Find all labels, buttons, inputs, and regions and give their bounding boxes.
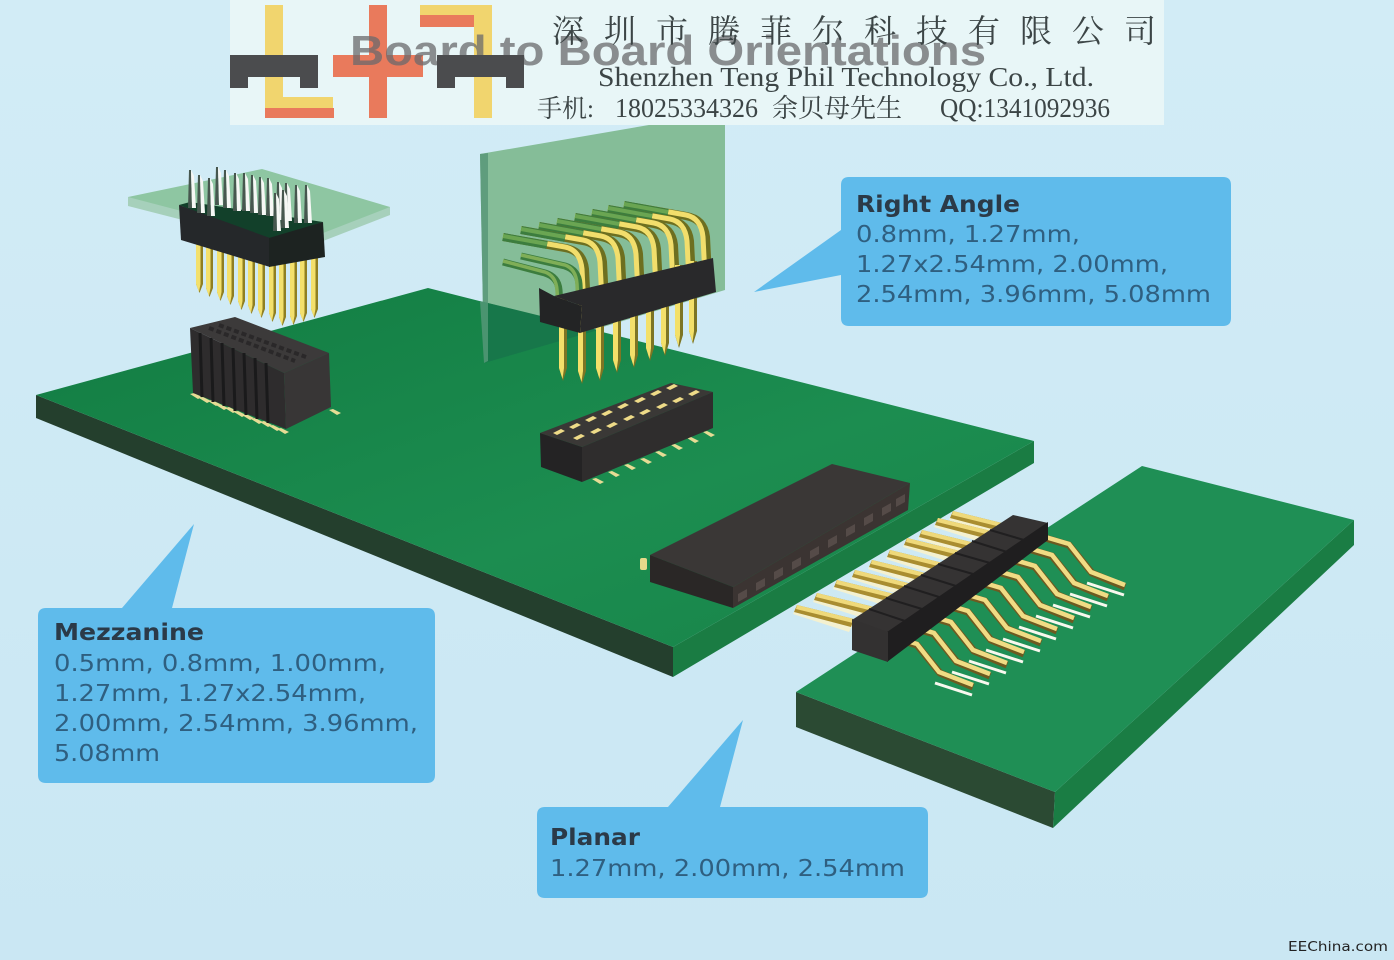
vertical translucent board (480, 112, 725, 363)
company name Chinese: 菲 (760, 13, 792, 49)
company name Chinese: 限 (1020, 13, 1052, 49)
rear bent pins (503, 204, 708, 309)
housing (539, 288, 582, 333)
callout: planar (537, 720, 928, 898)
contact line: 18025334326 (615, 93, 758, 123)
contact line: 手机: (537, 95, 594, 123)
front bent pins (503, 255, 580, 305)
contact line (537, 93, 1110, 123)
mezzanine socket (190, 317, 341, 434)
overlaid title: Board to Board Orientations (350, 27, 986, 74)
callout: planar: Planar (550, 825, 641, 851)
downward pins (559, 261, 697, 384)
planar socket (640, 464, 910, 608)
main circuit board (36, 288, 1034, 677)
company name Chinese: 腾 (708, 13, 740, 49)
company name Chinese: 公 (1072, 13, 1104, 49)
planar header connector (793, 511, 1125, 695)
callout: mezzanine: 5.08mm (54, 741, 160, 767)
socket holes (738, 494, 905, 602)
callout: right angle: 1.27x2.54mm, 2.00mm, (856, 252, 1168, 278)
gold pins (196, 218, 318, 326)
front gull-wing pins (890, 536, 1125, 695)
logo dark brackets (230, 55, 524, 88)
solder feet (592, 431, 715, 484)
callout: mezzanine: 2.00mm, 2.54mm, 3.96mm, (54, 711, 418, 737)
callout: planar: 1.27mm, 2.00mm, 2.54mm (550, 856, 905, 882)
company name Chinese: 深 (552, 13, 584, 49)
source credit: EEChina.com (1288, 940, 1388, 955)
company name Chinese: 技 (916, 13, 948, 49)
socket ridges (200, 333, 268, 423)
callout: right angle: 2.54mm, 3.96mm, 5.08mm (856, 282, 1211, 308)
silver pins (188, 167, 312, 231)
housing (852, 515, 1048, 633)
company name Chinese: 有 (968, 13, 1000, 49)
solder feet (190, 393, 341, 434)
callout: mezzanine: 1.27mm, 1.27x2.54mm, (54, 681, 366, 707)
company name Chinese: 司 (1124, 13, 1156, 49)
company name Chinese: 市 (656, 13, 688, 49)
company name Chinese: 科 (864, 13, 896, 49)
contact line: QQ:1341092936 (940, 93, 1110, 123)
SMT double-row socket (540, 383, 715, 484)
company name Chinese: 圳 (604, 13, 636, 49)
company name Chinese: 尔 (812, 13, 844, 49)
callout: mezzanine: 0.5mm, 0.8mm, 1.00mm, (54, 651, 386, 677)
right circuit board (796, 466, 1354, 828)
callout: right angle (754, 177, 1231, 326)
header banner (230, 0, 1164, 125)
callout: mezzanine: Mezzanine (54, 620, 204, 646)
housing (179, 202, 323, 240)
company name English: Shenzhen Teng Phil Technology Co., Ltd. (598, 62, 1094, 92)
right-angle connector (503, 204, 716, 384)
callout: mezzanine (38, 524, 435, 783)
callout: right angle: 0.8mm, 1.27mm, (856, 222, 1080, 248)
rear pins (793, 511, 1010, 632)
gold contacts (553, 384, 700, 440)
contact line: 余贝母先生 (772, 94, 902, 123)
mezzanine plug connector (179, 167, 325, 326)
mezzanine upper board (128, 169, 390, 250)
logo (265, 5, 492, 118)
callout: right angle: Right Angle (856, 192, 1020, 218)
